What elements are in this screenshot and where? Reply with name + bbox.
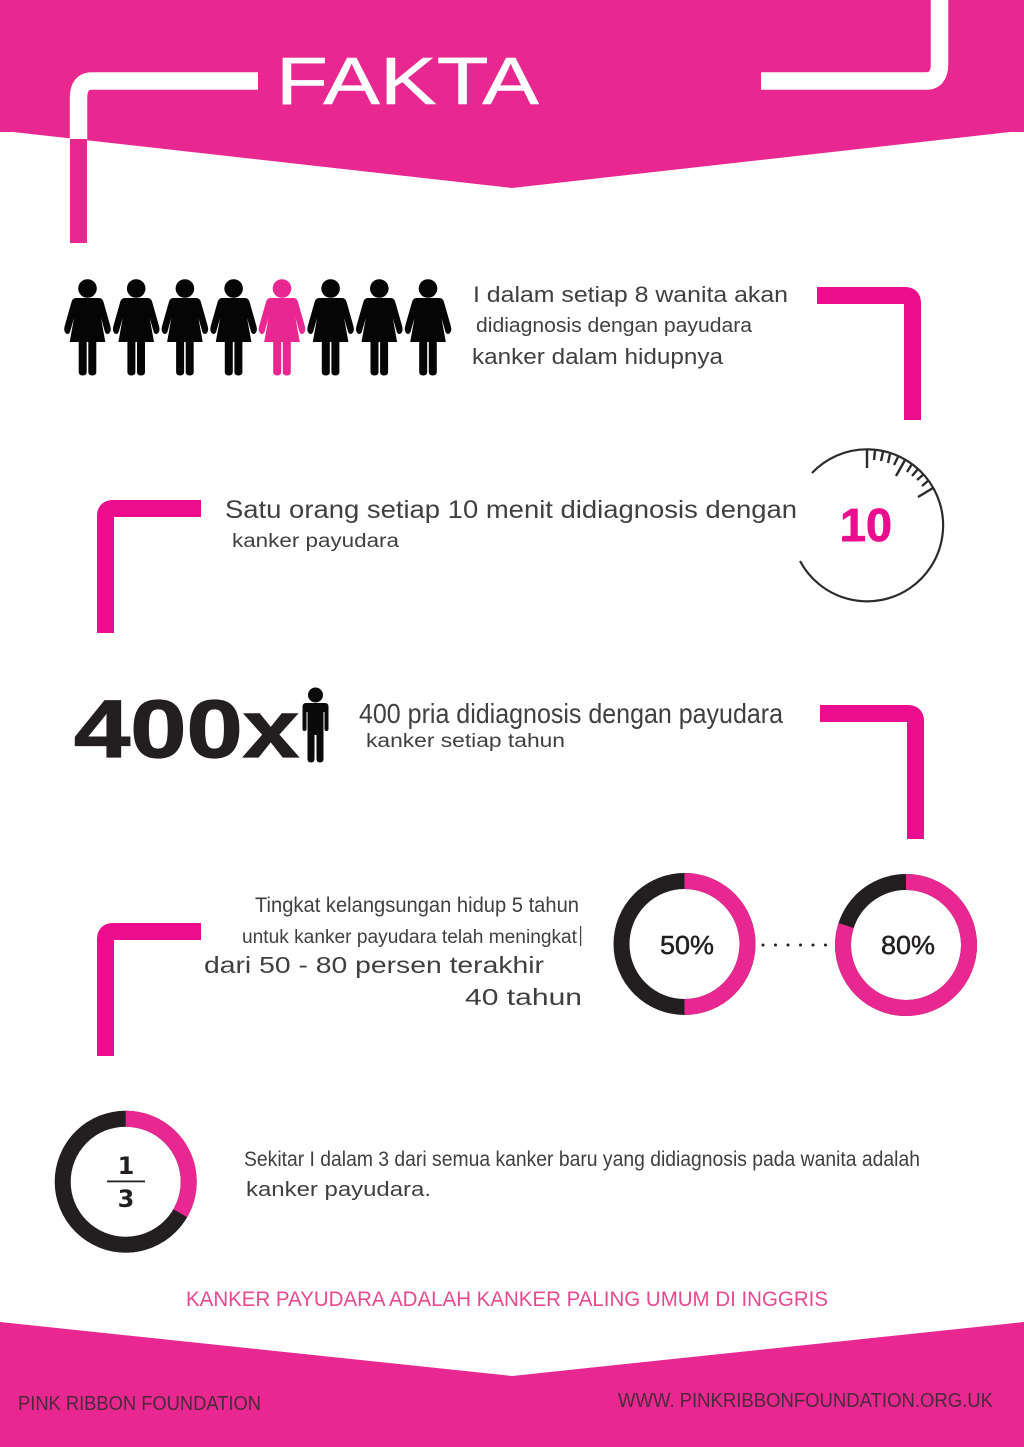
text: one in three: Sekitar I dalam 3 dari semua kanker baru yang didiagnosis pada wanita adalah (244, 1148, 920, 1171)
bracket: third fact (820, 714, 916, 839)
text: survival rate: untuk kanker payudara telah meningkat (242, 927, 578, 948)
text: 1 in 8 women: kanker dalam hidupnya (472, 344, 724, 369)
chart: one third donut: 1 (118, 1152, 134, 1180)
icon: clock with 10 minutes: 10 (840, 499, 892, 551)
chart: one third donut (63, 1119, 189, 1245)
footer organisation name: PINK RIBBON FOUNDATION (18, 1393, 261, 1415)
header left bracket (70, 81, 258, 243)
icon: man (302, 688, 328, 762)
footer band (0, 1322, 1024, 1447)
text: 1 in 8 women: didiagnosis dengan payudara (476, 315, 753, 337)
text: 400 men: 400 pria didiagnosis dengan payudara (359, 698, 783, 729)
chart: 80% donut (843, 882, 969, 1008)
chart: 50% donut: 50% (660, 930, 714, 960)
bracket: fourth fact (106, 932, 201, 1056)
title: FAKTA (276, 44, 539, 119)
statistic: 400x: 400x (74, 684, 299, 775)
text: 1 in 8 women (472, 282, 788, 369)
text: survival rate: Tingkat kelangsungan hidup 5 tahun (255, 894, 579, 917)
text: every 10 minutes: Satu orang setiap 10 menit didiagnosis dengan (225, 496, 797, 524)
text: survival rate (204, 894, 582, 1010)
text: 1 in 8 women: I dalam setiap 8 wanita akan (473, 282, 788, 307)
bracket: first fact (817, 296, 912, 420)
closing statement: KANKER PAYUDARA ADALAH KANKER PALING UMUM DI INGGRIS (186, 1288, 828, 1311)
text: survival rate: 40 tahun (465, 984, 582, 1010)
icon: clock with 10 minutes (800, 449, 943, 601)
icon: row of eight women (64, 279, 451, 376)
text: one in three (244, 1148, 920, 1201)
footer website: WWW. PINKRIBBONFOUNDATION.ORG.UK (618, 1390, 994, 1412)
dotted connector (762, 944, 827, 946)
text: 400 men: kanker setiap tahun (366, 731, 565, 752)
header band (0, 0, 1024, 188)
bracket: second fact (106, 508, 201, 633)
text: survival rate: dari 50 - 80 persen terakhir (204, 952, 544, 978)
text: 400 men (359, 698, 783, 752)
chart: one third donut: 3 (118, 1185, 134, 1213)
text: one in three: kanker payudara. (246, 1179, 431, 1201)
chart: 50% donut (622, 881, 748, 1007)
text: every 10 minutes: kanker payudara (232, 531, 399, 552)
chart: 80% donut: 80% (881, 930, 935, 960)
text: every 10 minutes (225, 496, 797, 552)
header right bracket (761, 0, 940, 81)
